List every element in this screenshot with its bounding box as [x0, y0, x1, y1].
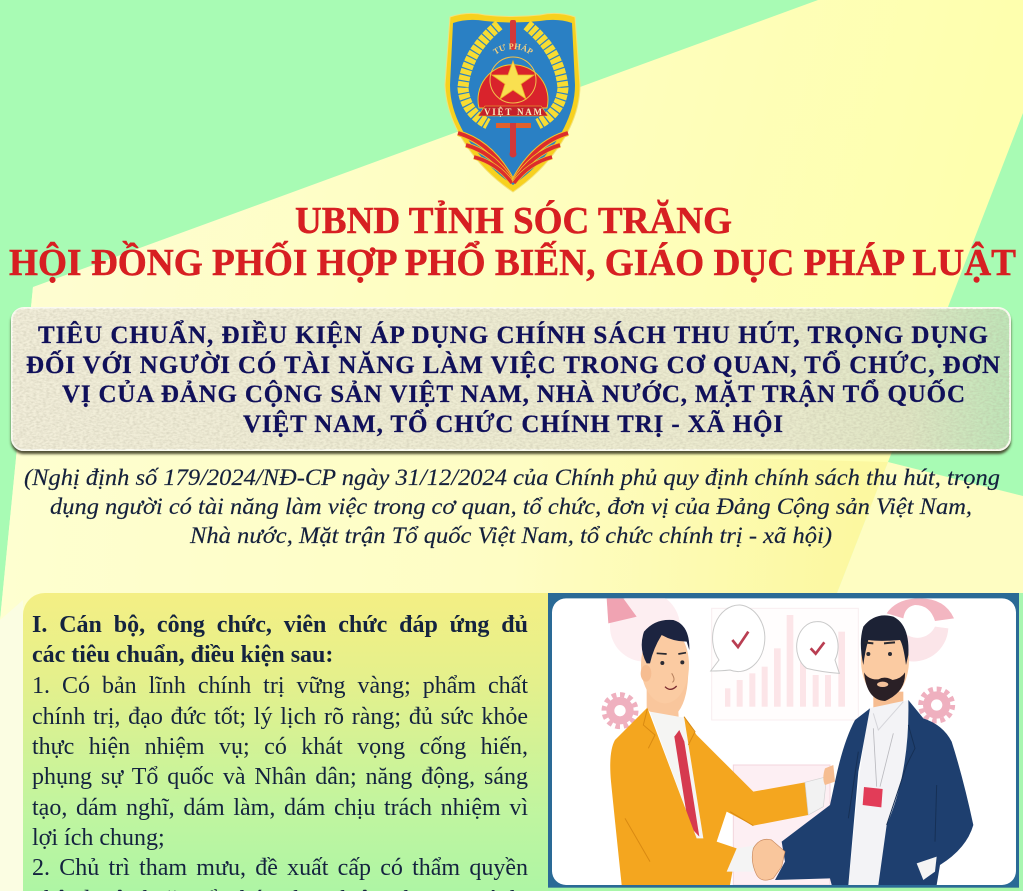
text block: criterion 1: thực hiện nhiệm vụ; có khát vọng cống hiến,: [32, 734, 528, 760]
gears: [604, 689, 953, 727]
heading: organisation title: [9, 200, 1016, 284]
laurel wreath: [463, 25, 563, 124]
heading: organisation title: HỘI ĐỒNG PHỐI HỢP PHỔ BIẾN, GIÁO DỤC PHÁP LUẬT: [9, 240, 1016, 284]
sword: [510, 20, 516, 50]
panel: criteria text: [23, 593, 548, 891]
text block: decree citation: dụng người có tài năng làm việc trong cơ quan, tổ chức, đơn vị của Đảng Cộng sản Việt Nam,: [50, 494, 972, 519]
heading: main title text: TIÊU CHUẨN, ĐIỀU KIỆN ÁP DỤNG CHÍNH SÁCH THU HÚT, TRỌNG DỤNG: [38, 320, 988, 349]
text block: criterion 1: tạo, dám nghĩ, dám làm, dám chịu trách nhiệm vì: [32, 795, 528, 821]
text block: criterion 1: 1. Có bản lĩnh chính trị vững vàng; phẩm chất: [32, 673, 528, 699]
icon: justice emblem shield: [444, 12, 580, 192]
text block: decree citation: Nhà nước, Mặt trận Tổ quốc Việt Nam, tổ chức chính trị - xã hội): [189, 523, 832, 548]
heading: main title text: VIỆT NAM, TỔ CHỨC CHÍNH TRỊ - XÃ HỘI: [243, 409, 783, 438]
handshake: [752, 839, 785, 880]
illustration: two businessmen shaking hands: [548, 592, 1019, 888]
heading: main title text: [26, 320, 1000, 438]
text block: decree citation: (Nghị định số 179/2024/NĐ-CP ngày 31/12/2024 của Chính phủ quy định chính sách thu hút, trọng: [24, 465, 1000, 490]
speech bubbles with check marks: [711, 605, 839, 673]
background chart shapes: [604, 592, 954, 885]
heading: main title text: VỊ CỦA ĐẢNG CỘNG SẢN VIỆT NAM, NHÀ NƯỚC, MẶT TRẬN TỔ QUỐC: [62, 379, 965, 408]
heading: main title text: ĐỐI VỚI NGƯỜI CÓ TÀI NĂNG LÀM VIỆC TRONG CƠ QUAN, TỔ CHỨC, ĐƠN: [26, 350, 1000, 379]
heading: section I: các tiêu chuẩn, điều kiện sau:: [32, 642, 333, 668]
text block: criterion 1: [32, 673, 528, 851]
text block: decree citation: [24, 465, 1000, 548]
red seal with star: [478, 65, 548, 108]
man in orange suit: [610, 620, 827, 885]
heading: section I: [32, 612, 528, 668]
text block: criterion 1: chính trị, đạo đức tốt; lý lịch rõ ràng; đủ sức khỏe: [32, 704, 528, 730]
book wings: [458, 133, 568, 183]
heading: section I: I. Cán bộ, công chức, viên chức đáp ứng đủ: [32, 612, 528, 638]
banner: [478, 106, 548, 116]
heading: organisation title: UBND TỈNH SÓC TRĂNG: [295, 200, 732, 242]
text block: criterion 1: phụng sự Tổ quốc và Nhân dân; năng động, sáng: [32, 764, 528, 790]
text block: criterion 1: lợi ích chung;: [32, 825, 165, 851]
icon: justice emblem shield: VIỆT NAM: [484, 107, 542, 117]
man in navy suit: [775, 615, 973, 885]
text block: criterion 2: 2. Chủ trì tham mưu, đề xuất cấp có thẩm quyền: [32, 855, 528, 881]
icon: justice emblem shield: TƯ PHÁP: [492, 43, 533, 54]
panel: main title box: [12, 308, 1010, 450]
